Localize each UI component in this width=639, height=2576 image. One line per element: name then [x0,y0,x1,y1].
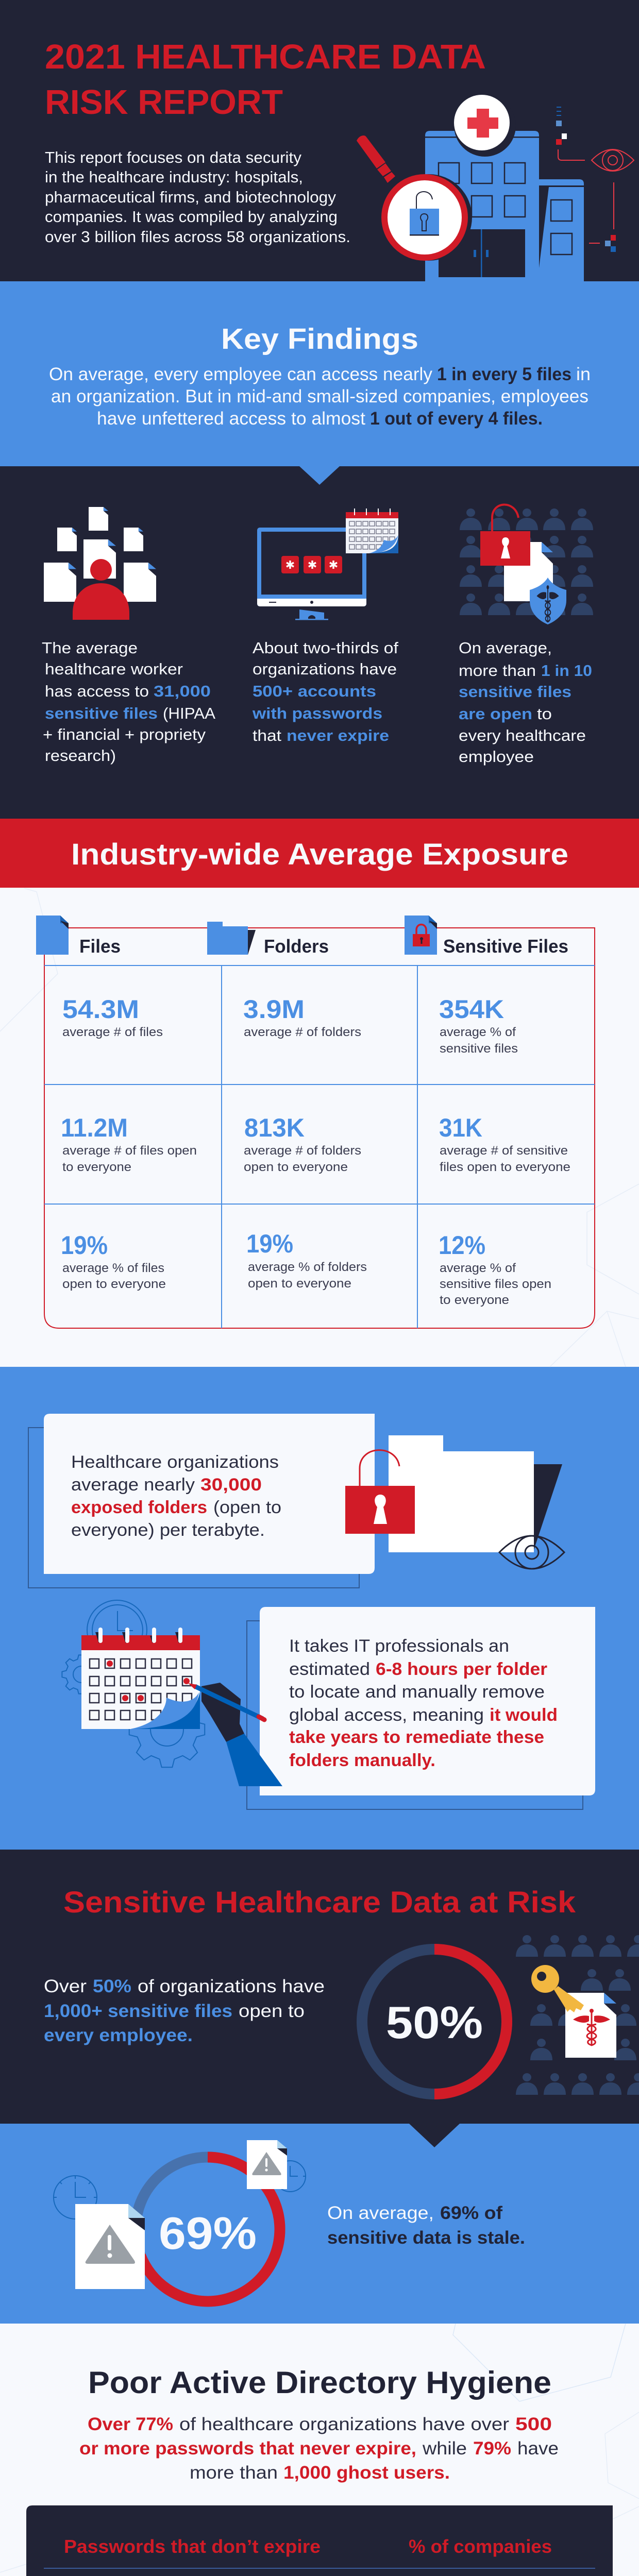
key findings paragraph: have unfettered access to almost [97,409,365,429]
callout text: Healthcare organizations [71,1452,279,1472]
table header [64,2536,552,2557]
icon: calendar, clock, gears and hand [62,1600,282,1786]
hygiene paragraph: more than [190,2463,278,2483]
key finding 2 text: with passwords [252,704,382,722]
key finding 3 text: more than [459,662,536,680]
stat values: 12% [439,1231,485,1260]
panel: exposure table [36,916,595,1328]
intro paragraph: over 3 billion files across 58 organizations. [45,228,350,246]
header: folders: Folders [264,936,329,957]
icon: stale document large [75,2204,145,2289]
stat labels: to everyone [440,1293,509,1307]
key finding 1 text: sensitive files [45,704,158,722]
icon: clock right [275,2161,306,2192]
key finding 3 text: to [537,705,552,723]
sensitive data text: every employee. [44,2025,193,2045]
stale data text: sensitive data is stale. [327,2228,525,2248]
hygiene paragraph: Over 77% [88,2414,173,2434]
key finding 2 text: that [253,726,281,744]
icon: folder [207,922,256,955]
title [45,38,486,122]
intro paragraph: companies. It was compiled by analyzing [45,208,338,226]
table header: % of companies [409,2536,552,2557]
stale data text [327,2203,525,2248]
intro paragraph [45,148,350,246]
callout text: it would [490,1705,558,1725]
key findings paragraph: an organization. But in mid-and small-sized companies, employees [51,386,588,406]
callout text: everyone) per terabyte. [71,1520,265,1540]
heading: industry-wide average exposure: Industry-wide Average Exposure [71,838,568,871]
hygiene paragraph: while [422,2438,467,2459]
key finding 3 text: employee [459,748,534,766]
stat labels: average # of folders [244,1025,361,1039]
key finding 2 text: 500+ accounts [253,682,376,700]
hospital main building [425,95,539,281]
intro paragraph: pharmaceutical firms, and biotechnology [45,188,337,206]
panel: remediation callout [247,1607,595,1809]
hygiene paragraph: 79% [473,2438,511,2459]
sensitive data text [44,1976,325,2045]
stat labels: average # of files [62,1025,163,1039]
stat values: 3.9M [243,995,305,1024]
icon: stale document small [247,2140,287,2189]
stat values: 54.3M [62,995,139,1024]
icon: worker and files [44,507,156,620]
key finding 1 text [42,639,215,765]
icon: crowd, key and medical file [516,1935,639,2095]
stat labels: open to everyone [248,1277,351,1291]
callout text [71,1452,281,1540]
hygiene paragraph: of healthcare organizations have over [179,2414,509,2434]
stat values [61,995,504,1260]
sensitive data text: open to [239,2001,305,2021]
hygiene paragraph: 1,000 ghost users. [283,2463,450,2483]
donut chart: 69% [136,2157,280,2301]
stat labels [62,1025,570,1307]
panel: exposed folders callout [28,1414,375,1588]
donut chart: 69%: 69% [159,2208,257,2259]
key finding 3 text: 1 in 10 [541,662,592,680]
callout text: (open to [213,1498,281,1517]
panel: passwords table [26,2505,613,2576]
callout text: exposed folders [71,1498,207,1517]
key findings paragraph: On average, every employee can access nearly [49,364,432,384]
key finding 3 text [459,639,592,766]
table frame and grid [44,928,595,1328]
stat labels: average % of files [62,1261,164,1275]
header: files: Files [79,936,121,957]
callout text: 30,000 [200,1475,262,1495]
magnifier [357,135,472,281]
intro paragraph: This report focuses on data security [45,148,301,166]
hygiene paragraph: 500 [515,2414,552,2434]
key finding 2 text: organizations have [253,660,397,678]
key finding 1 text: (HIPAA [163,704,215,722]
icon: sensitive file [405,916,437,955]
key finding 1 text: healthcare worker [45,660,183,678]
icon: file [36,916,69,955]
stat labels: average % of folders [248,1260,367,1274]
hygiene paragraph [79,2414,559,2483]
callout text: to locate and manually remove [289,1682,545,1702]
icon: lock, document and crowd [460,504,593,624]
stat labels: open to everyone [244,1160,348,1174]
stat labels: files open to everyone [440,1160,570,1174]
heading: key findings: Key Findings [221,323,418,355]
callout text: It takes IT professionals an [289,1636,509,1656]
key finding 1 text: research) [45,747,116,765]
callout text: 6-8 hours per folder [376,1659,547,1679]
icon: exposed folder with lock and eye [345,1435,564,1569]
key finding 1 text: The average [42,639,138,657]
donut chart: 50%: 50% [386,1997,483,2048]
sensitive data text: 1,000+ sensitive files [44,2001,232,2021]
stat values: 354K [439,995,504,1024]
pointer arrow [409,2124,460,2147]
stat values: 19% [246,1229,293,1258]
hygiene paragraph: or more passwords that never expire, [79,2438,416,2459]
stat values: 19% [61,1231,108,1260]
title: 2021 HEALTHCARE DATA [45,38,486,76]
callout text: estimated [289,1659,370,1679]
callout text: global access, meaning [289,1705,484,1725]
callout text: average nearly [71,1475,195,1495]
key finding 2 text: never expire [287,726,389,744]
key finding 3 text: are open [459,705,532,723]
header: sensitive files: Sensitive Files [443,936,568,957]
key findings paragraph [49,364,591,429]
sensitive data text: Over [44,1976,87,1996]
icon: hospital with magnifier [357,95,634,281]
hygiene paragraph: have [517,2438,559,2459]
key finding 1 text: 31,000 [154,682,211,700]
stat labels: to everyone [62,1160,131,1174]
key findings paragraph: in [576,364,591,384]
key finding 1 text: has access to [45,682,149,700]
callout text: folders manually. [289,1751,435,1770]
key finding 2 text [252,639,398,744]
data connector and eye [556,107,634,252]
sensitive data text: 50% [93,1976,131,1996]
sensitive data text: of organizations have [138,1976,325,1996]
key finding 3 text: On average, [459,639,552,657]
key finding 3 text: every healthcare [459,726,586,744]
stat values: 813K [244,1113,305,1142]
icon: monitor with passwords and calendar [257,509,398,620]
stat labels: sensitive files open [440,1277,551,1291]
callout text [289,1636,558,1770]
key finding 2 text: About two-thirds of [253,639,398,657]
heading: sensitive healthcare data at risk: Sensitive Healthcare Data at Risk [63,1886,576,1919]
table header: Passwords that don’t expire [64,2536,321,2557]
key findings paragraph: 1 in every 5 files [437,364,571,384]
callout text: take years to remediate these [289,1727,544,1747]
intro paragraph: in the healthcare industry: hospitals, [45,168,303,186]
title: RISK REPORT [45,83,283,122]
stat labels: open to everyone [62,1277,166,1291]
stat values: 11.2M [61,1113,128,1142]
stale data text: 69% of [440,2203,502,2223]
heading: poor active directory hygiene: Poor Active Directory Hygiene [88,2365,551,2400]
donut chart: 50% [362,1950,507,2094]
stat labels: average # of folders [244,1144,361,1158]
icon: clock left [54,2176,97,2219]
stat labels: average # of sensitive [440,1144,568,1158]
key finding 3 text: sensitive files [459,683,571,701]
hospital wing [539,179,584,281]
stat labels: average % of [440,1025,516,1039]
stale data text: On average, [327,2203,434,2223]
key finding 1 text: + financial + propriety [43,725,206,743]
stat labels: average # of files open [62,1144,197,1158]
stat labels: average % of [440,1261,516,1275]
pointer arrow [299,466,340,485]
stat values: 31K [439,1113,482,1142]
stat labels: sensitive files [440,1042,518,1056]
key findings paragraph: 1 out of every 4 files. [370,409,543,429]
